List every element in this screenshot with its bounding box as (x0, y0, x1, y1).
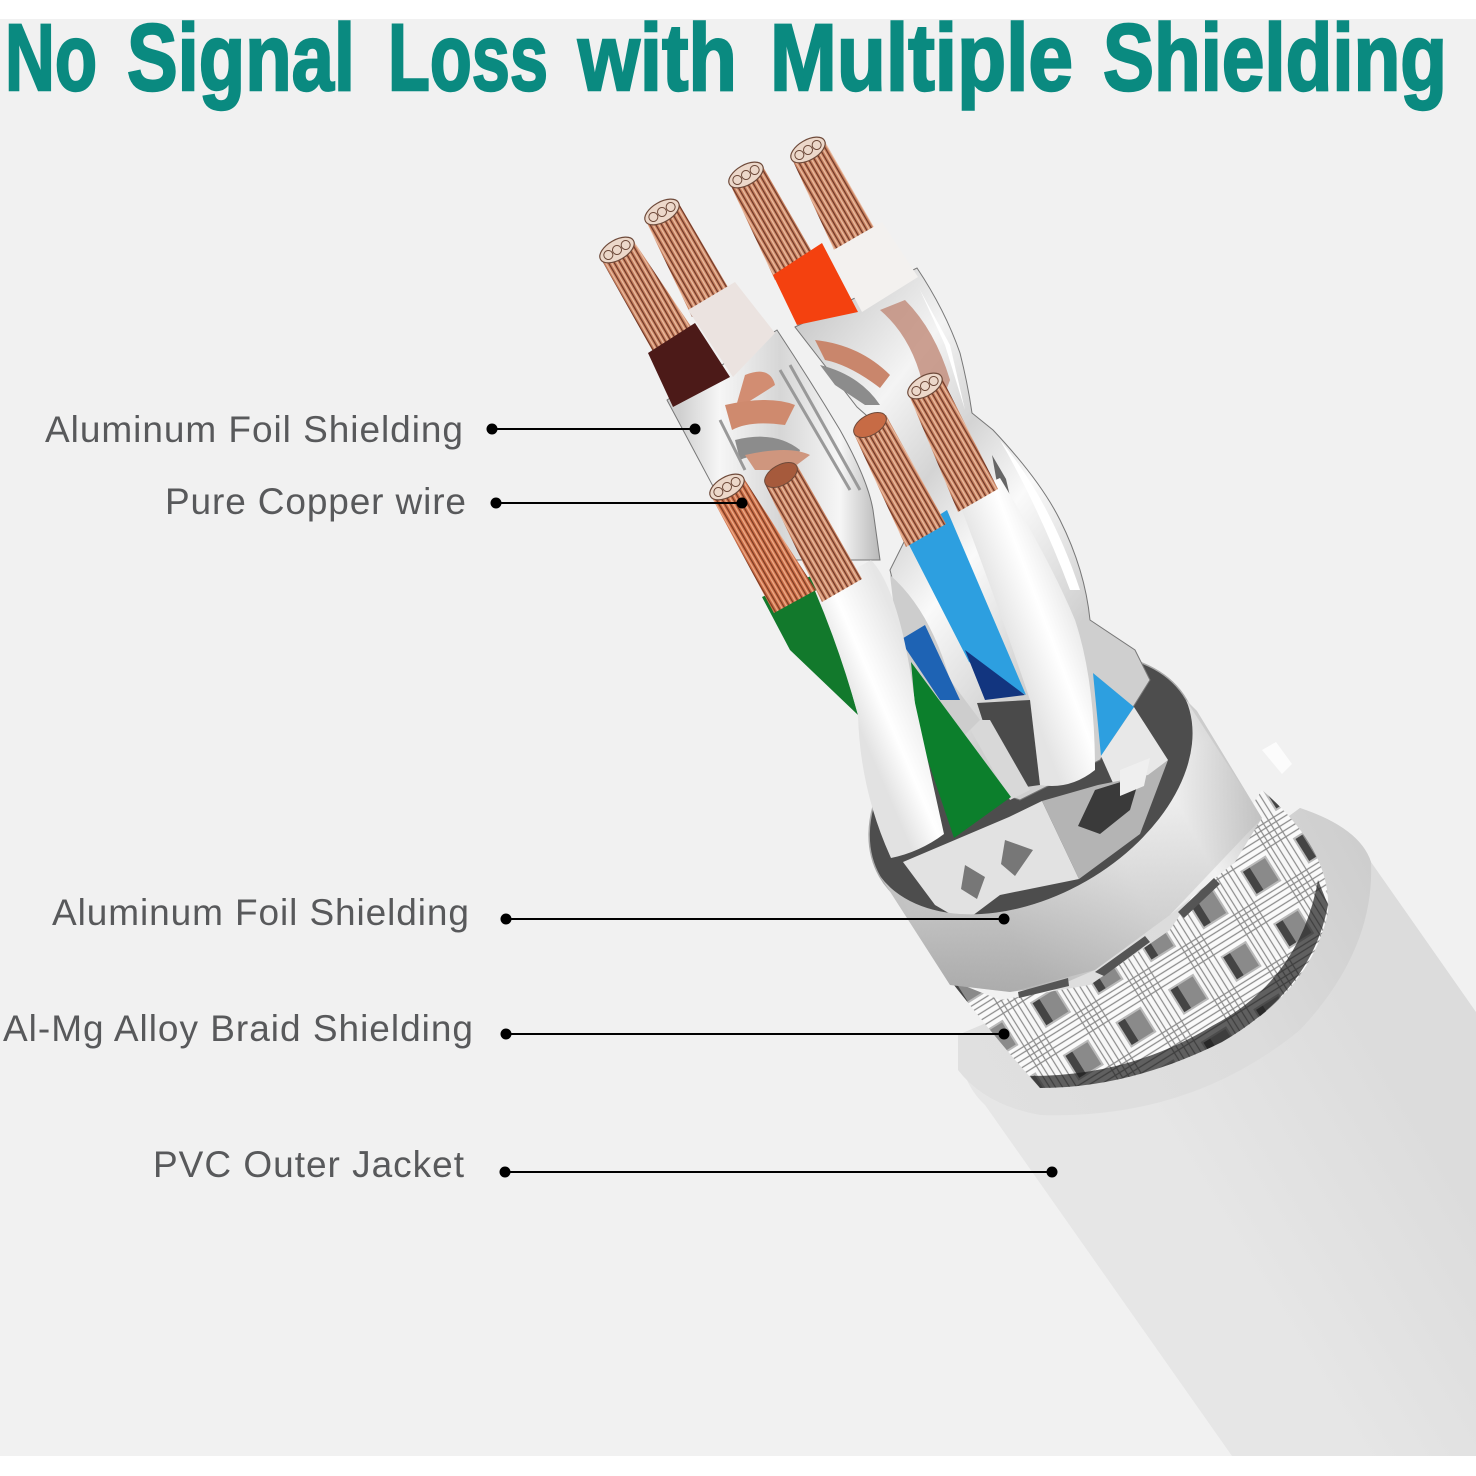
callout: al-mg alloy braid shielding (3, 1008, 1010, 1049)
central foil core (965, 700, 1168, 810)
callout: aluminum foil shielding (outer) (52, 892, 1010, 933)
callout: pvc outer jacket (153, 1144, 1058, 1185)
callout: pure copper wire (165, 481, 748, 522)
braid shielding (950, 742, 1328, 1088)
callout: aluminum foil shielding (outer): Aluminum Foil Shielding (52, 892, 469, 933)
front foil with copper reflections (667, 330, 880, 560)
callout: aluminum foil shielding (inner) (45, 409, 700, 450)
wire pair: orange and white (725, 132, 918, 325)
callout: al-mg alloy braid shielding: Al-Mg Alloy Braid Shielding (3, 1008, 473, 1049)
title: Multiple (770, 5, 1073, 111)
aluminum foil ring (880, 700, 1262, 998)
cable illustration (596, 132, 1476, 1456)
title: Signal (127, 5, 355, 111)
crumpled foil inside ring (903, 758, 1168, 922)
wire pair: blue and white (849, 368, 1134, 786)
wire pair: brown and white (596, 194, 775, 407)
wire pair: green and white (706, 457, 1011, 858)
callout: aluminum foil shielding (inner): Aluminum Foil Shielding (45, 409, 463, 450)
inner back of aluminum ring (822, 599, 1244, 977)
foil pair: back foil and twist (795, 268, 1150, 800)
callout: pvc outer jacket: PVC Outer Jacket (153, 1144, 465, 1185)
PVC outer jacket (958, 808, 1476, 1456)
callout: pure copper wire: Pure Copper wire (165, 481, 466, 522)
title: No (5, 5, 97, 111)
title (5, 5, 1447, 111)
title: with (577, 5, 737, 111)
title: Loss (388, 5, 548, 111)
